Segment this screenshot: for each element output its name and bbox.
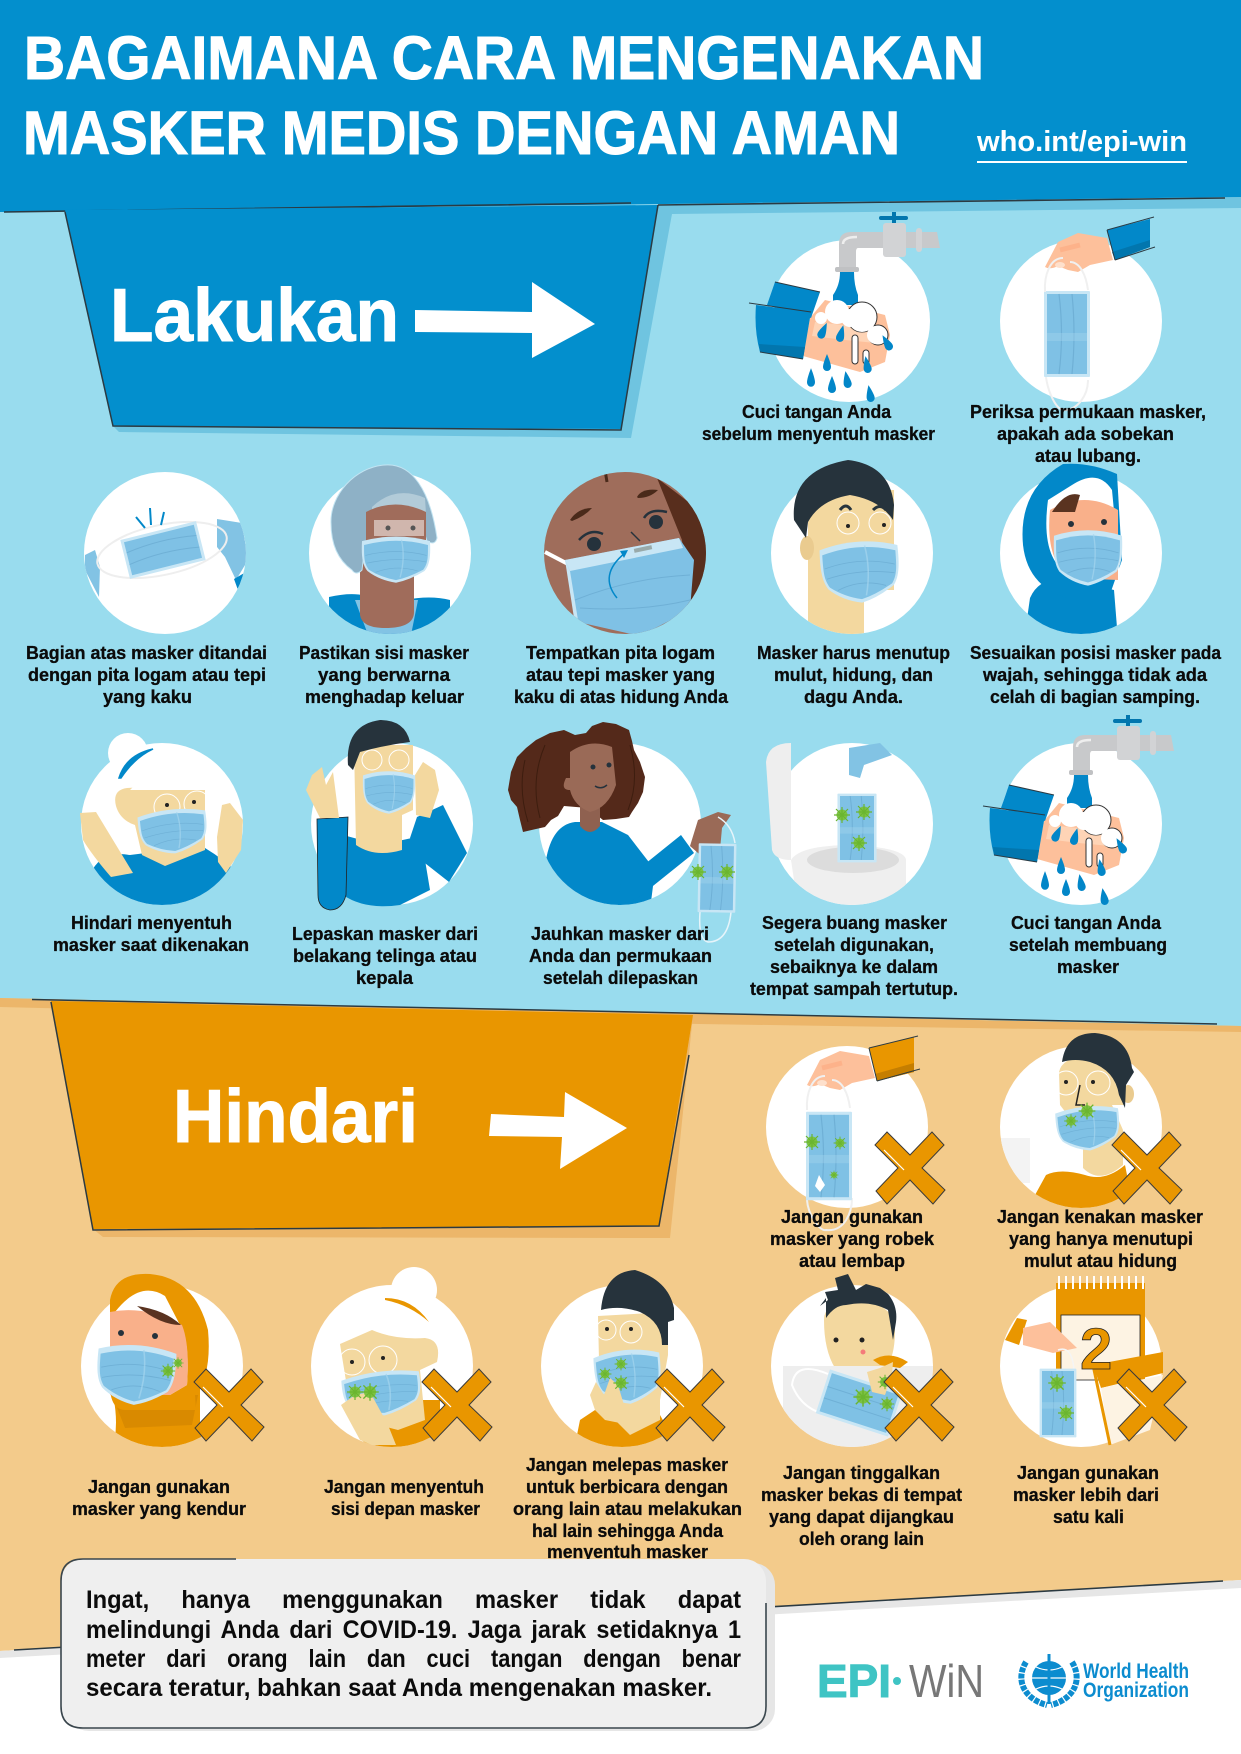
icon: washing hands again [983, 715, 1174, 906]
step: menutup mulut [757, 460, 950, 707]
caption: satu kali [1053, 1507, 1124, 1527]
caption: untuk berbicara dengan [526, 1477, 728, 1497]
caption: Segera buang masker [762, 913, 947, 933]
caption: oleh orang lain [799, 1529, 924, 1549]
section divider band, orange [0, 998, 1241, 1032]
panel: Hindari heading: Hindari [173, 1074, 418, 1158]
blue section background [0, 190, 1241, 1040]
callout: reminder box: secara teratur, bahkan saat Anda mengenakan masker. [86, 1674, 712, 1702]
caption: atau lubang. [1035, 446, 1141, 466]
caption: wajah, sehingga tidak ada [982, 665, 1208, 685]
caption: Masker harus menutup [757, 643, 950, 663]
caption: Pastikan sisi masker [299, 643, 469, 663]
caption [292, 924, 478, 988]
bottom divider line [14, 1581, 1223, 1650]
icon: close-up face with mask and arrow [544, 470, 712, 636]
callout: reminder box [61, 1559, 775, 1731]
caption: masker [1057, 957, 1119, 977]
caption [757, 643, 950, 707]
icon: woman with loose mask [81, 1274, 243, 1450]
title: MASKER MEDIS DENGAN AMAN [23, 99, 900, 167]
caption: masker saat dikenakan [53, 935, 249, 955]
step: hanya menutupi mulut [997, 1033, 1203, 1271]
step: lepaskan masker [292, 720, 478, 988]
caption: dengan pita logam atau tepi [28, 665, 266, 685]
caption: Bagian atas masker ditandai [26, 643, 267, 663]
caption [970, 643, 1222, 707]
icon: man removing mask [306, 720, 473, 910]
caption: menghadap keluar [305, 687, 464, 707]
caption: apakah ada sobekan [997, 424, 1174, 444]
icon: man with mask below nose [1000, 1033, 1162, 1215]
step: jauhkan masker [508, 722, 736, 988]
title: BAGAIMANA CARA MENGENAKAN [24, 24, 984, 92]
orange section background [0, 998, 1241, 1651]
step: cuci tangan [702, 212, 940, 444]
logo: EPI-WIN: EPI [817, 1655, 891, 1707]
logo: EPI-WIN: WiN [909, 1655, 984, 1707]
caption: sebaiknya ke dalam [770, 957, 938, 977]
caption: setelah digunakan, [774, 935, 934, 955]
bottom grey band [0, 1580, 1241, 1658]
caption: mulut, hidung, dan [774, 665, 933, 685]
panel: Lakukan heading: Lakukan [110, 273, 399, 357]
X mark [655, 1369, 725, 1441]
icon: torn mask [766, 1036, 928, 1230]
caption: masker yang robek [770, 1229, 935, 1249]
X mark [884, 1369, 954, 1441]
caption: kepala [356, 968, 414, 988]
caption [1009, 913, 1167, 977]
caption [26, 643, 267, 707]
icon: calendar and reused mask: 2 [1080, 1317, 1112, 1382]
arrow [415, 282, 595, 358]
caption: Jauhkan masker dari [531, 924, 709, 944]
caption: Anda dan permukaan [529, 946, 712, 966]
caption: Jangan melepas masker [526, 1455, 728, 1475]
X mark [1117, 1369, 1187, 1441]
caption [970, 402, 1206, 466]
step: hindari menyentuh [53, 733, 249, 955]
icon: woman in blue hijab [1000, 464, 1162, 640]
caption: kaku di atas hidung Anda [514, 687, 729, 707]
caption: sisi depan masker [331, 1499, 480, 1519]
step: sesuaikan posisi [970, 464, 1222, 707]
caption [513, 1455, 742, 1562]
step: hidung [514, 470, 729, 707]
caption [997, 1207, 1203, 1271]
caption: Jangan menyentuh [324, 1477, 484, 1497]
caption [72, 1477, 246, 1519]
logo: World Health Organization: World Health [1083, 1660, 1189, 1683]
step: lebih dari satu kali [1000, 1276, 1187, 1527]
caption: masker bekas di tempat [761, 1485, 962, 1505]
caption [324, 1477, 484, 1519]
icon: mask held by gloves [84, 472, 248, 634]
caption: yang hanya menutupi [1009, 1229, 1193, 1249]
step: masker kendur [72, 1274, 264, 1519]
icon: older woman touching mask [311, 1267, 473, 1450]
X mark [1112, 1132, 1182, 1204]
caption [750, 913, 958, 999]
caption: yang berwarna [318, 665, 451, 685]
step: sisi depan [311, 1267, 492, 1519]
caption: Lepaskan masker dari [292, 924, 478, 944]
caption: setelah membuang [1009, 935, 1167, 955]
step: sisi berwarna [299, 465, 471, 707]
caption: orang lain atau melakukan [513, 1499, 742, 1519]
caption: sebelum menyentuh masker [702, 424, 935, 444]
X mark [422, 1369, 492, 1441]
icon: older woman with hands beside mask [80, 733, 243, 915]
X mark [194, 1369, 264, 1441]
caption: Cuci tangan Anda [1011, 913, 1162, 933]
website link: who.int/epi-win [976, 126, 1187, 158]
panel: Lakukan heading [65, 205, 658, 430]
caption: yang kaku [103, 687, 192, 707]
icon: man wearing mask [771, 460, 933, 640]
caption [1013, 1463, 1159, 1527]
icon: mask dropped into toilet [766, 743, 933, 920]
step: buang masker [750, 743, 958, 999]
caption: setelah dilepaskan [543, 968, 698, 988]
icon: man lowering mask to speak [541, 1270, 703, 1450]
caption: celah di bagian samping. [990, 687, 1200, 707]
step: masker bekas [761, 1274, 962, 1549]
caption [53, 913, 249, 955]
logo: EPI-WIN [817, 1655, 984, 1707]
icon: hand holding mask [1000, 217, 1162, 410]
caption [514, 643, 729, 707]
caption: atau lembap [799, 1251, 905, 1271]
caption: Cuci tangan Anda [742, 402, 892, 422]
caption [299, 643, 469, 707]
step: cuci tangan setelah [983, 715, 1174, 977]
icon: woman holding mask away [508, 722, 736, 942]
caption: yang dapat dijangkau [769, 1507, 954, 1527]
title [23, 24, 984, 167]
caption [702, 402, 935, 444]
icon: health worker with face shield [309, 465, 471, 640]
caption: Periksa permukaan masker, [970, 402, 1206, 422]
caption: Jangan gunakan [88, 1477, 230, 1497]
logo: World Health Organization [1021, 1654, 1189, 1705]
caption: Sesuaikan posisi masker pada [970, 643, 1222, 663]
caption: belakang telinga atau [293, 946, 477, 966]
step: robek atau lembap [766, 1036, 945, 1271]
callout: reminder box: Ingat, hanya menggunakan masker tidak dapat [86, 1586, 742, 1614]
caption [529, 924, 712, 988]
caption: Jangan gunakan [1017, 1463, 1159, 1483]
icon: boy reaching for used mask in sink [771, 1274, 940, 1450]
caption: Hindari menyentuh [71, 913, 232, 933]
logo: World Health Organization: Organization [1083, 1679, 1189, 1702]
caption: Jangan kenakan masker [997, 1207, 1203, 1227]
caption: Jangan tinggalkan [783, 1463, 940, 1483]
header banner [0, 0, 1241, 438]
caption: dagu Anda. [804, 687, 903, 707]
arrow [489, 1092, 627, 1169]
step: periksa masker [970, 217, 1206, 466]
caption: Tempatkan pita logam [526, 643, 715, 663]
caption [761, 1463, 962, 1549]
caption [770, 1207, 935, 1271]
caption: tempat sampah tertutup. [750, 979, 958, 999]
caption: mulut atau hidung [1024, 1251, 1177, 1271]
icon: calendar and reused mask [1000, 1276, 1163, 1447]
callout: reminder box: meter dari orang lain dan cuci tangan dengan benar [86, 1645, 741, 1673]
panel: Hindari heading [32, 1000, 1217, 1238]
caption: hal lain sehingga Anda [532, 1521, 724, 1541]
caption: masker yang kendur [72, 1499, 246, 1519]
icon: washing hands [749, 212, 940, 403]
step: pita logam [26, 472, 267, 707]
caption: Jangan gunakan [781, 1207, 923, 1227]
caption: masker lebih dari [1013, 1485, 1159, 1505]
X mark [875, 1132, 945, 1204]
callout: reminder box: melindungi Anda dari COVID-19. Jaga jarak setidaknya 1 [86, 1616, 741, 1644]
caption: atau tepi masker yang [526, 665, 715, 685]
caption: menyentuh masker [547, 1542, 708, 1562]
step: melepas masker [513, 1270, 742, 1562]
